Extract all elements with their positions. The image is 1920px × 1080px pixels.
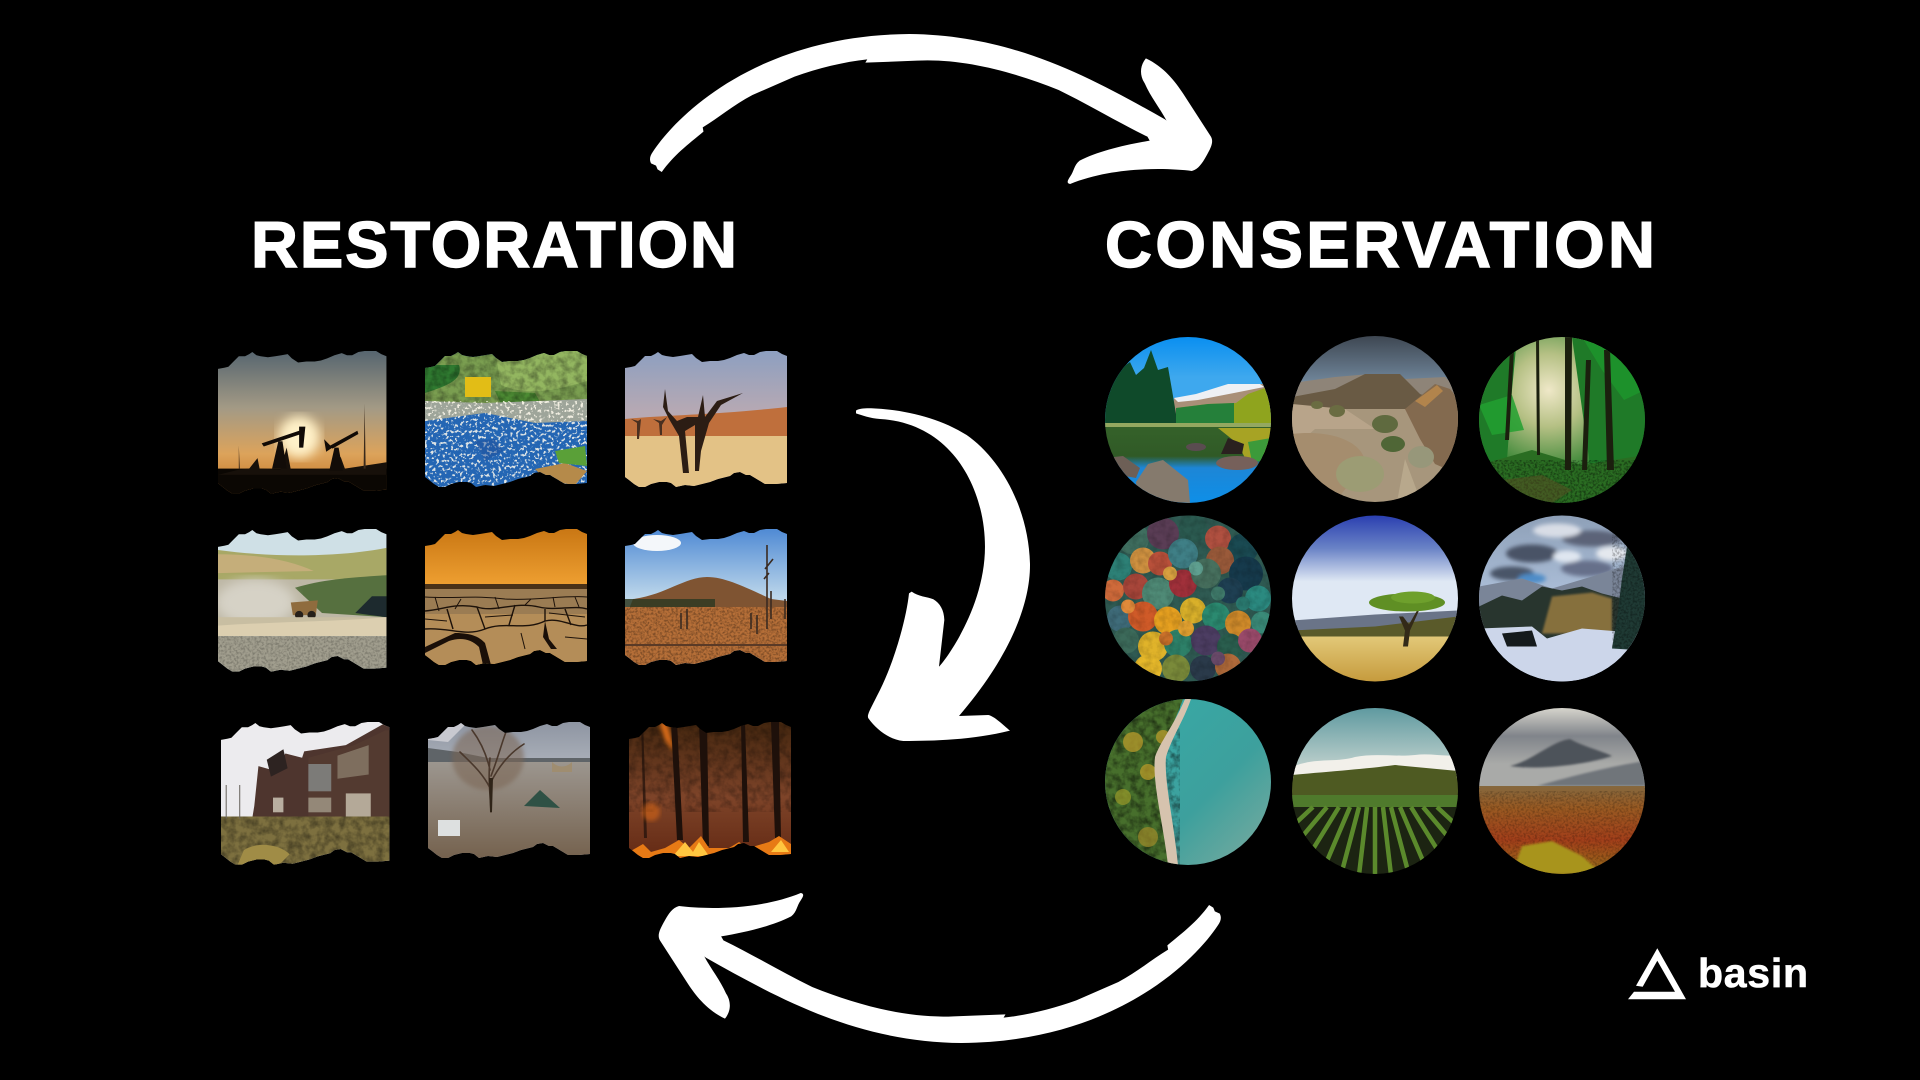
photo: cracked drought earth [425, 529, 587, 665]
infographic canvas [218, 34, 1806, 1043]
photo: dead trees in desert [625, 351, 787, 488]
photo: deforested burnt hill [625, 529, 787, 667]
panel: restoration photo grid [216, 351, 791, 865]
arrow: conservation to restoration [659, 893, 1221, 1043]
heading: restoration: RESTORATION [251, 208, 737, 281]
photo: open pit mining truck [216, 529, 386, 672]
arrow: restoration to conservation [650, 34, 1212, 184]
photo: sunlit jungle [1479, 337, 1645, 503]
photo: vineyard rows [1292, 708, 1458, 874]
photo: derelict brick factory [221, 722, 389, 865]
photo: polluted stream [425, 351, 587, 487]
photo: oil pumpjacks at sunset [218, 351, 386, 496]
icon: triangle mark [1628, 948, 1686, 999]
photo: forest wildfire [629, 722, 791, 858]
photo: flooded landscape [428, 722, 590, 858]
panel: conservation photo grid [1102, 336, 1645, 876]
heading: conservation: CONSERVATION [1105, 208, 1655, 281]
photo: snowy forest [1479, 516, 1645, 682]
photo: alpine lake [1105, 337, 1271, 503]
photo: arid scrubland [1292, 336, 1458, 503]
photo: misty tundra [1479, 708, 1645, 876]
arrow: centre curved arrow [856, 408, 1030, 741]
photo: coastline aerial [1105, 699, 1271, 865]
logo: basin [1628, 948, 1808, 999]
photo: autumn forest aerial [1102, 514, 1273, 682]
logo wordmark: basin [1698, 950, 1808, 996]
photo: savanna acacia [1292, 516, 1458, 682]
